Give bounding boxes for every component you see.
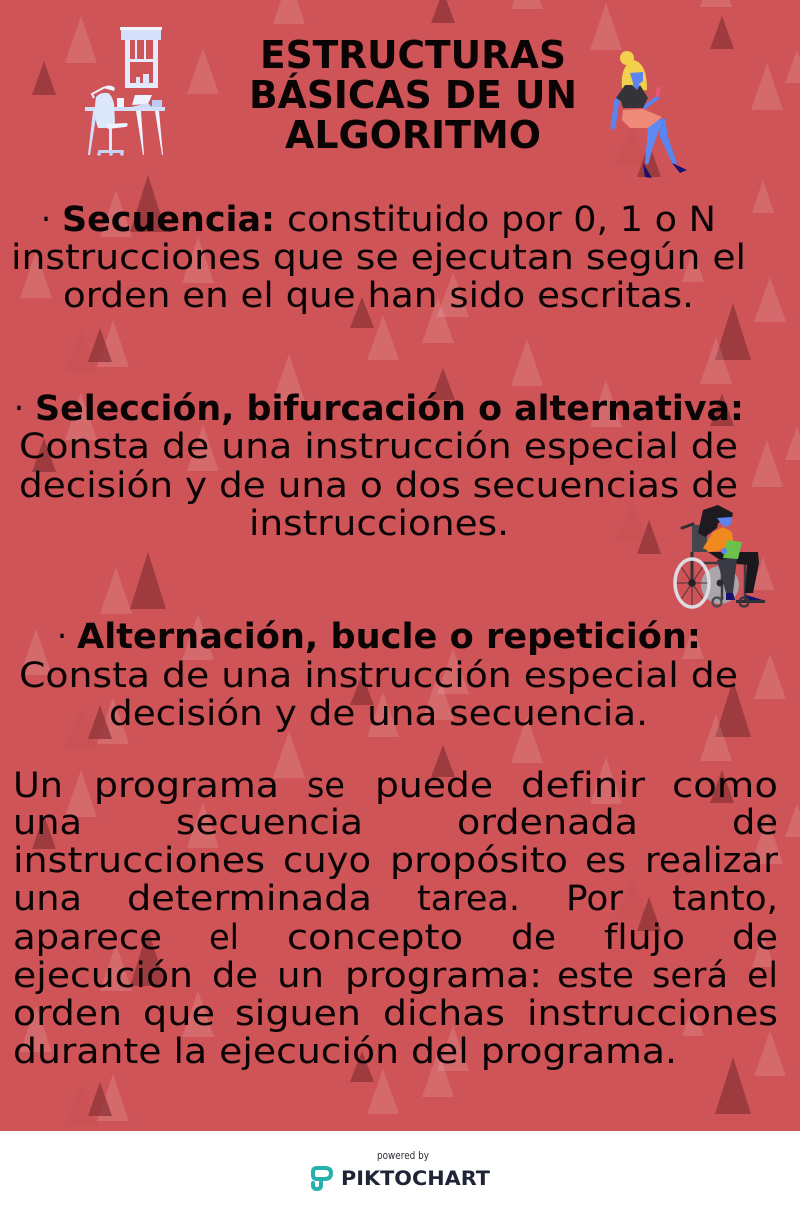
justified paragraph: concepto (287, 918, 463, 958)
justified paragraph: flujo (604, 918, 685, 958)
justified paragraph (13, 766, 779, 1072)
powered by label: powered by (377, 1150, 429, 1162)
justified paragraph: tanto, (672, 879, 778, 919)
section: selección: decisión y de una o dos secuencias de (19, 466, 738, 506)
justified paragraph: una (13, 879, 82, 919)
justified paragraph: una (13, 803, 82, 843)
title: BÁSICAS DE UN (249, 73, 577, 117)
section: selección: Selección, bifurcación o alternativa: (35, 389, 744, 429)
justified paragraph: ordenada (457, 803, 638, 843)
justified paragraph: propósito (390, 841, 568, 881)
section: alternación (19, 617, 738, 734)
justified paragraph: Un (13, 766, 63, 806)
piktochart wordmark: PIKTOCHART (341, 1167, 491, 1190)
justified paragraph: se (307, 766, 345, 806)
section: secuencia: · (41, 200, 51, 240)
section: secuencia: constituido por 0, 1 o N (287, 200, 716, 240)
justified paragraph: cuyo (283, 841, 371, 881)
justified paragraph: determinada (127, 879, 372, 919)
icon: desk with window and chair (85, 27, 165, 156)
justified paragraph: el (209, 918, 239, 958)
section: selección: Consta de una instrucción especial de (19, 427, 738, 467)
section: selección: · (14, 389, 24, 429)
justified paragraph: puede (375, 766, 493, 806)
justified paragraph: programa (94, 766, 279, 806)
footer panel (0, 1131, 800, 1211)
justified paragraph: de (212, 956, 258, 996)
justified paragraph: dichas (383, 994, 505, 1034)
section: alternación: Alternación, bucle o repetición: (77, 617, 701, 657)
justified paragraph: instrucciones (527, 994, 778, 1034)
icon: woman in wheelchair reading (675, 505, 765, 608)
section: selección (14, 389, 744, 544)
section: secuencia: instrucciones que se ejecutan según el (11, 238, 746, 278)
justified paragraph: programa: (345, 956, 542, 996)
icon: piktochart logo (313, 1168, 331, 1189)
justified paragraph: ejecución (13, 956, 193, 996)
justified paragraph: siguen (235, 994, 361, 1034)
justified paragraph: de (732, 918, 778, 958)
justified paragraph: durante la ejecución del programa. (13, 1032, 677, 1072)
section: secuencia: Secuencia: (62, 200, 275, 240)
justified paragraph: como (672, 766, 778, 806)
title: ALGORITMO (285, 113, 541, 157)
justified paragraph: tarea. (417, 879, 520, 919)
section: secuencia (11, 200, 746, 316)
justified paragraph: será (652, 956, 728, 996)
icon: seated woman with phone (613, 51, 687, 178)
section: alternación: decisión y de una secuencia. (109, 694, 648, 734)
justified paragraph: secuencia (176, 803, 363, 843)
justified paragraph: orden (13, 994, 122, 1034)
section: alternación: · (57, 617, 67, 657)
justified paragraph: el (747, 956, 778, 996)
justified paragraph: definir (521, 766, 646, 806)
justified paragraph: es (585, 841, 626, 881)
justified paragraph: instrucciones (13, 841, 265, 881)
section: secuencia: orden en el que han sido escritas. (63, 276, 694, 316)
justified paragraph: realizar (645, 841, 779, 881)
justified paragraph: que (143, 994, 215, 1034)
justified paragraph: aparece (13, 918, 162, 958)
justified paragraph: un (277, 956, 324, 996)
justified paragraph: Por (566, 879, 624, 919)
justified paragraph: de (511, 918, 556, 958)
section: selección: instrucciones. (249, 504, 509, 544)
justified paragraph: este (557, 956, 634, 996)
title (249, 33, 577, 157)
title: ESTRUCTURAS (260, 33, 566, 77)
section: alternación: Consta de una instrucción especial de (19, 656, 738, 696)
justified paragraph: de (732, 803, 778, 843)
